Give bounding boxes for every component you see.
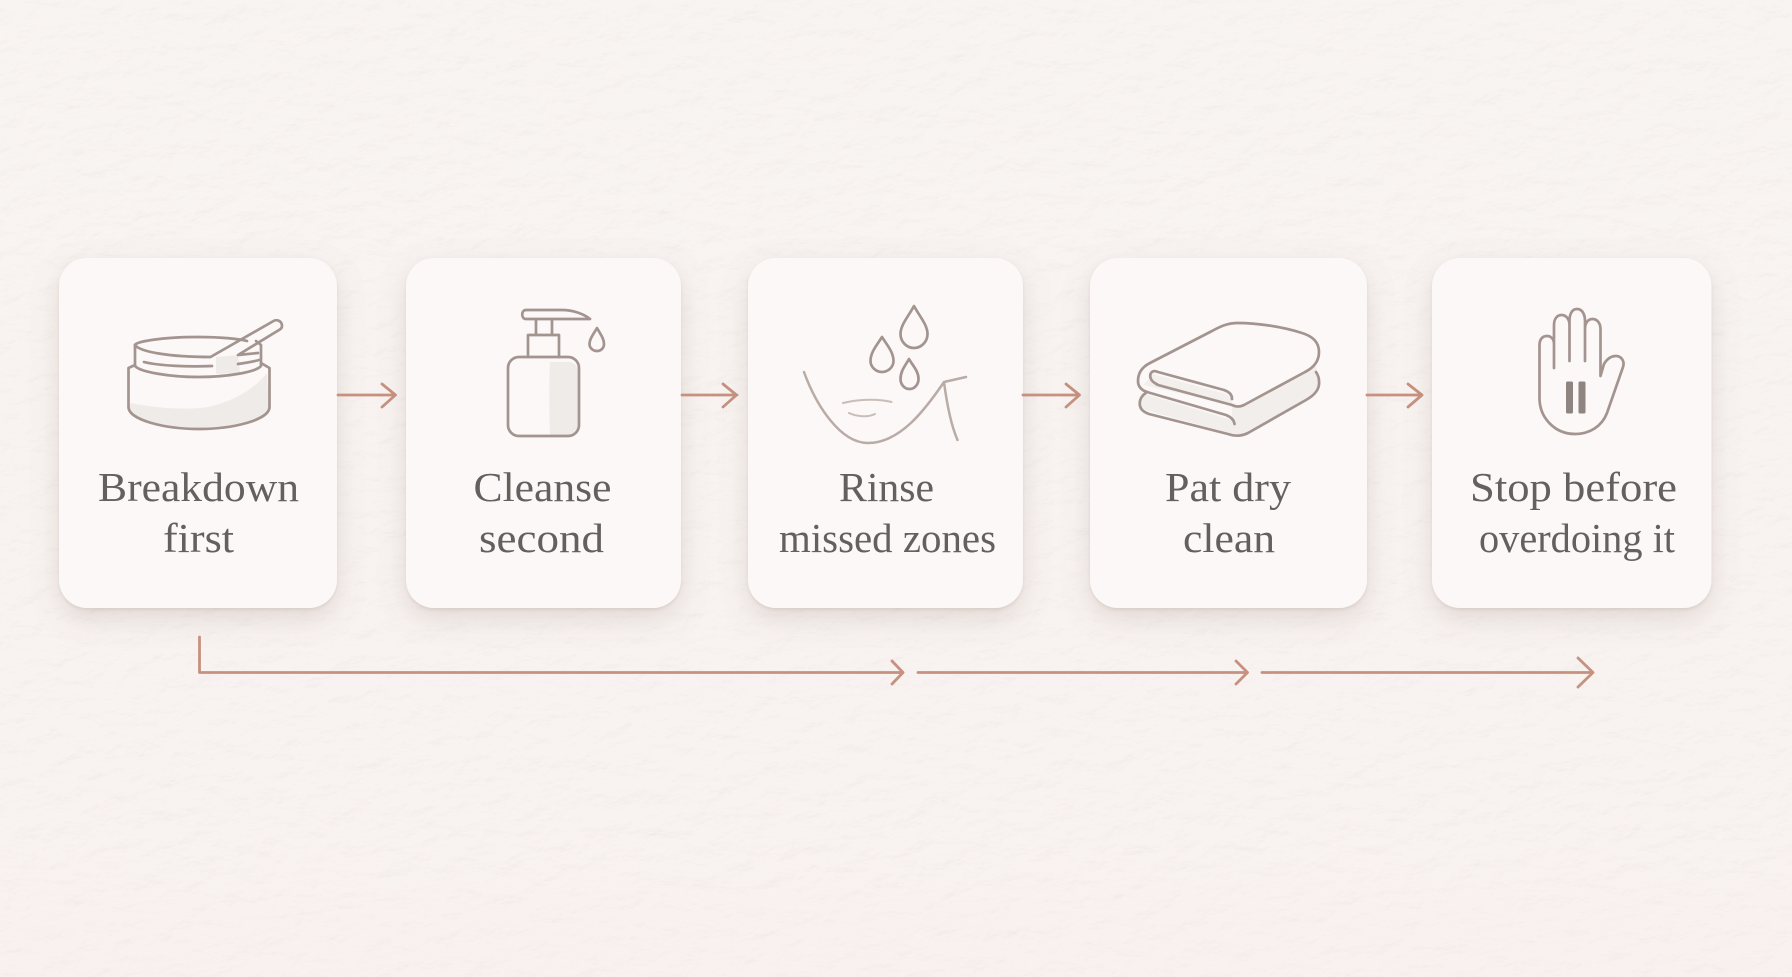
step card: Breakdown first [59,258,337,608]
connector: long elbow arrow to step 3 [200,637,903,684]
icon: raised hand with pause bars [1540,309,1624,434]
step card: Pat dry clean [1090,258,1367,608]
label: Stop before overdoing it [1470,464,1677,561]
label: Stop before overdoing it: overdoing it [1479,515,1676,561]
label: Cleanse second: second [479,515,604,561]
label: Stop before overdoing it: Stop before [1470,464,1677,510]
step card: Rinse missed zones [748,258,1023,608]
label: Rinse missed zones: missed zones [779,515,996,561]
label: Breakdown first [98,464,299,561]
arrow: step 4 to step 5 [1367,384,1422,407]
arrow: step 1 to step 2 [338,384,396,407]
label: Pat dry clean: Pat dry [1165,464,1292,510]
arrow: step 3 to step 4 [1023,384,1080,407]
icon: pump bottle [508,310,604,436]
label: Rinse missed zones [779,464,996,561]
label: Cleanse second [474,464,612,561]
label: Breakdown first: first [163,515,235,561]
label: Pat dry clean [1165,464,1292,561]
connector: arrow to step 5 [1262,658,1593,687]
step card: Stop before overdoing it [1432,258,1712,608]
icon: cream jar with spatula [128,320,282,429]
arrow: step 2 to step 3 [682,384,737,407]
step card: Cleanse second [406,258,681,608]
connector: arrow to step 4 [918,661,1248,684]
icon: face with water drops [804,306,966,443]
label: Cleanse second: Cleanse [474,464,612,510]
label: Breakdown first: Breakdown [98,464,299,510]
icon: folded towels [1138,323,1319,436]
label: Rinse missed zones: Rinse [839,464,934,510]
label: Pat dry clean: clean [1183,515,1275,561]
